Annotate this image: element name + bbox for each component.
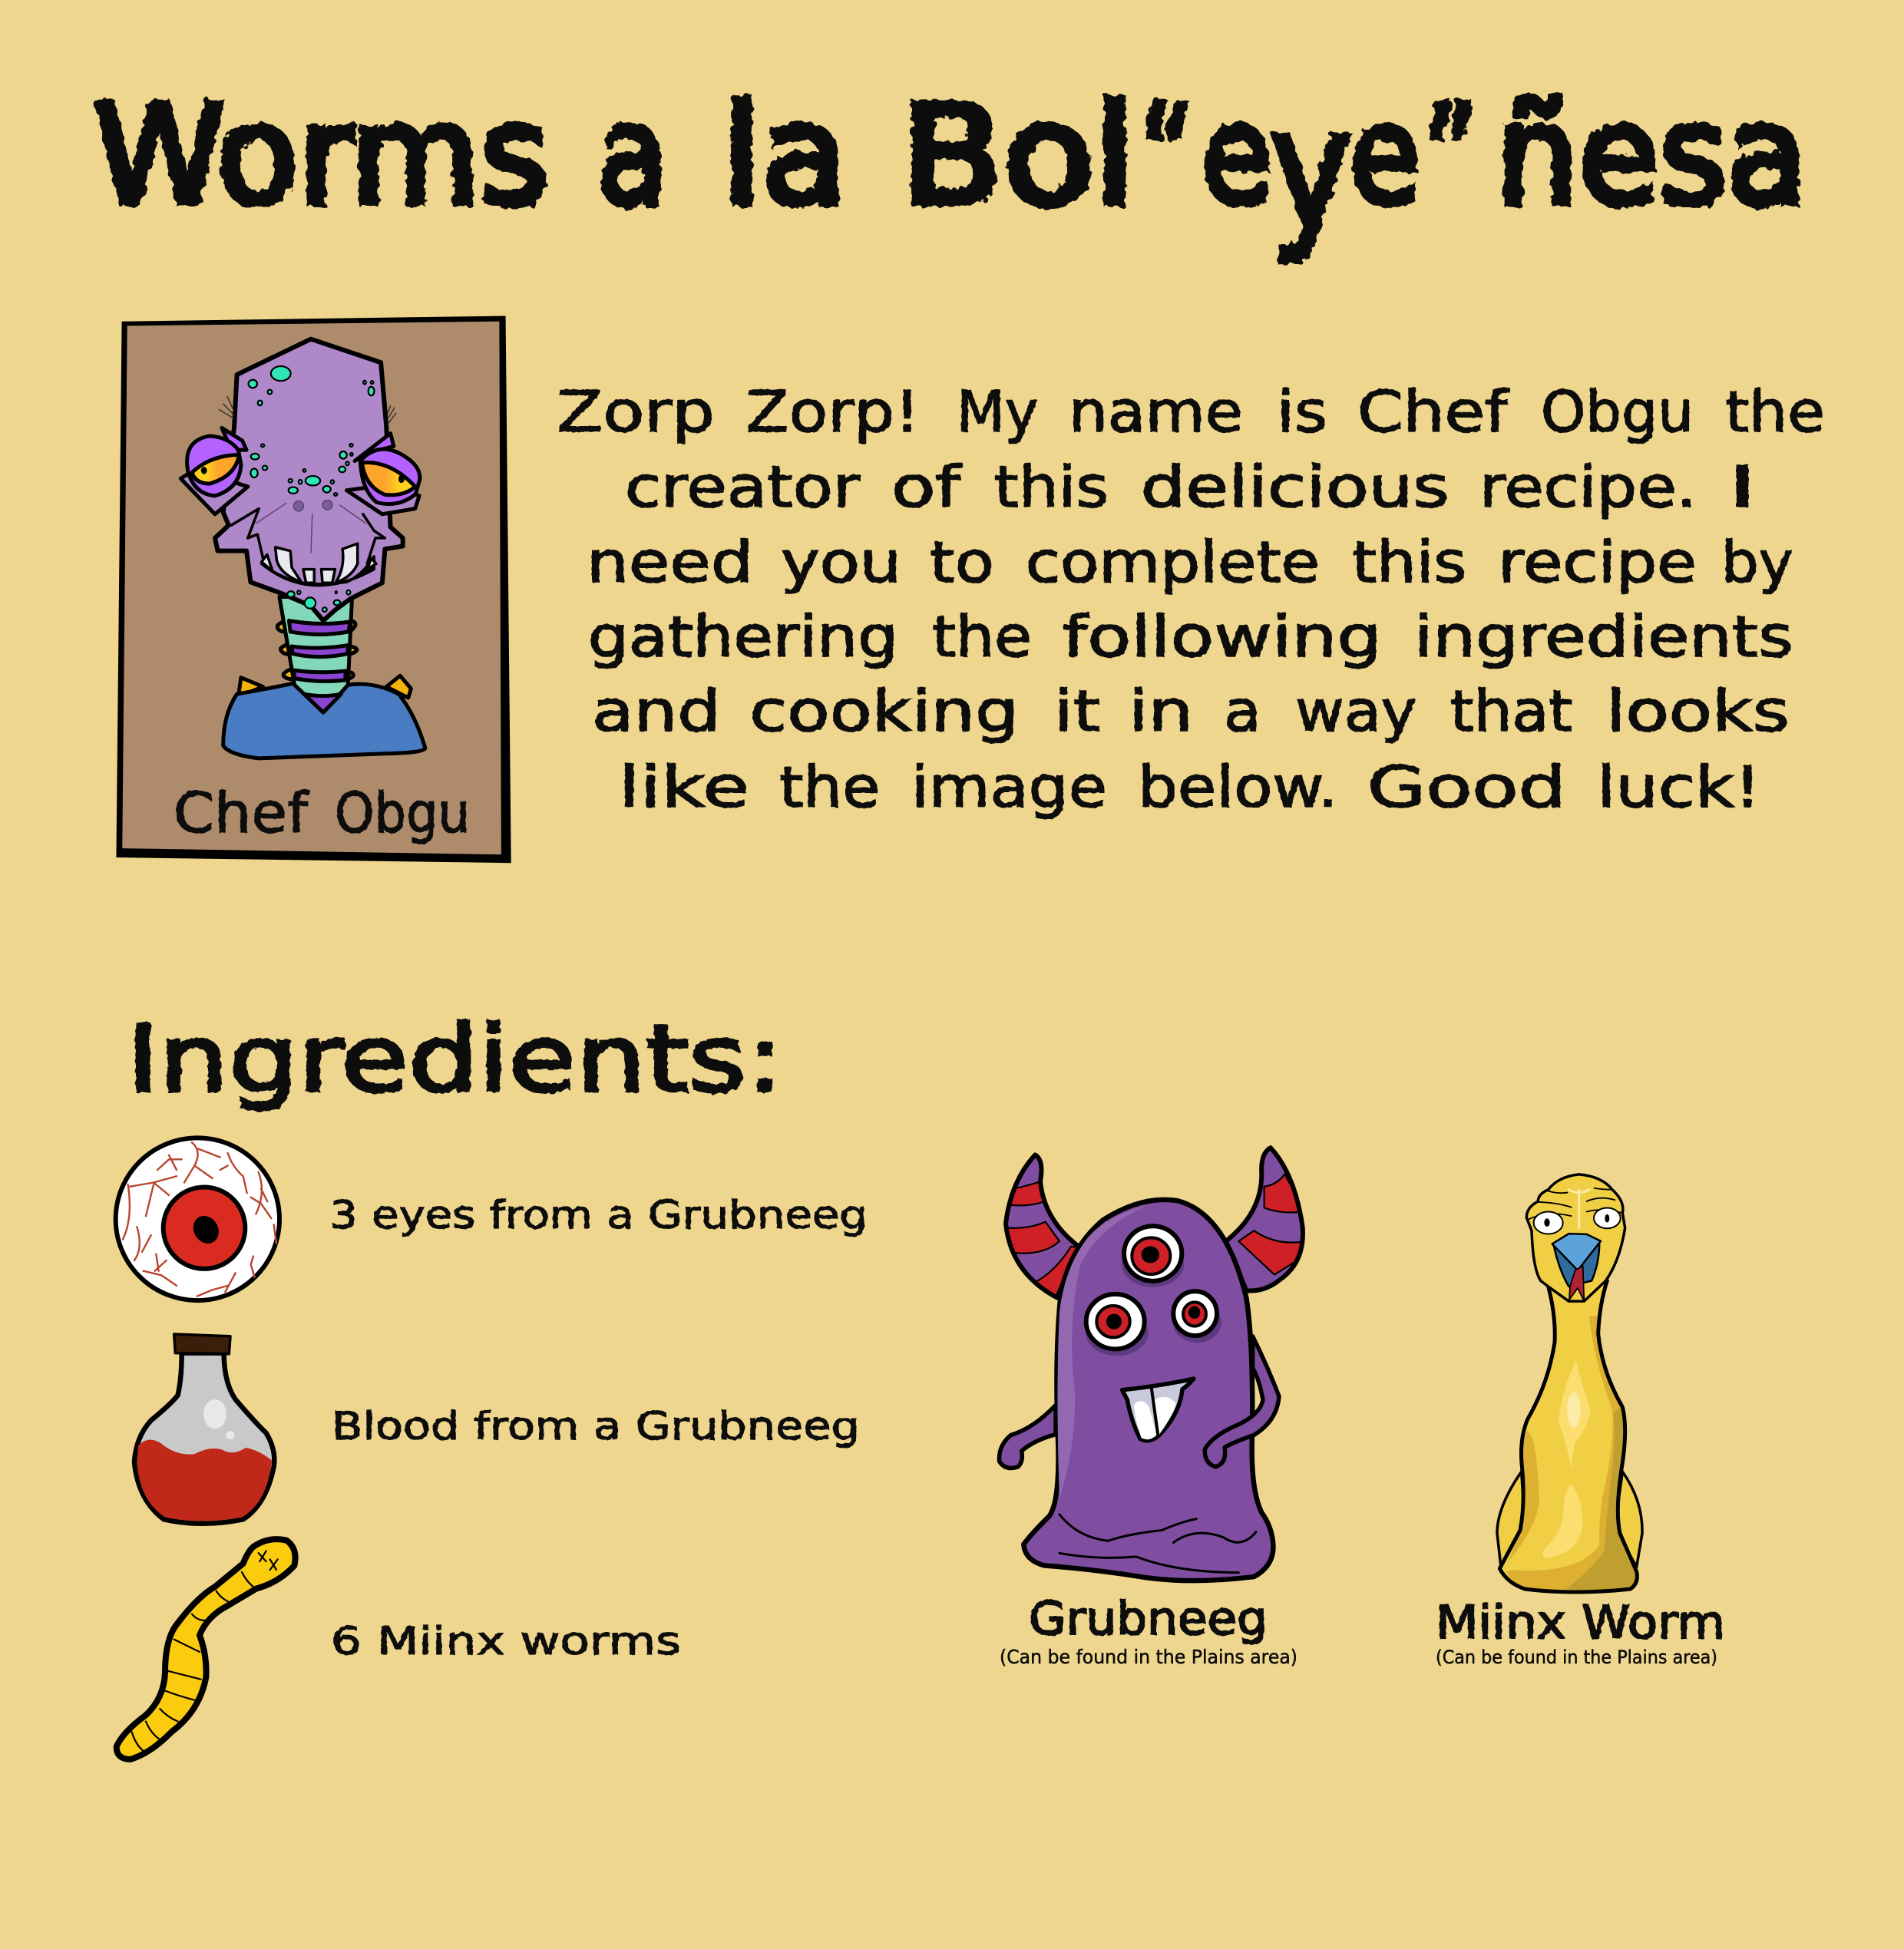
body outline [1499, 1280, 1637, 1592]
left horn [1006, 1155, 1079, 1297]
intro paragraph: to [930, 530, 994, 596]
intro paragraph: I [1727, 454, 1757, 520]
intro paragraph: it [1054, 679, 1100, 745]
heading: Ingredients: Ingredients: [127, 1006, 783, 1113]
portrait caption: Obgu [335, 781, 470, 845]
intro paragraph: and [592, 679, 721, 745]
intro paragraph: Good [1367, 755, 1566, 821]
ingredient text: eyes: 3 eyes from a Grubneeg [329, 1193, 868, 1237]
side lobes [1497, 1472, 1526, 1567]
intro paragraph: gathering [588, 604, 898, 670]
intro paragraph: complete [1026, 530, 1320, 596]
portrait: green freckles [249, 366, 374, 612]
intro paragraph: the [1725, 379, 1825, 445]
intro paragraph: the [932, 604, 1032, 670]
intro paragraph: in [1129, 679, 1193, 745]
eyeball iris [164, 1188, 245, 1269]
intro paragraph: name [1069, 379, 1243, 445]
intro paragraph: luck! [1597, 755, 1761, 821]
intro paragraph: Zorp! [745, 379, 920, 445]
portrait: mouth and teeth [231, 509, 385, 586]
eyeball veins [123, 1142, 276, 1297]
flask cork [174, 1334, 230, 1354]
portrait: nose [256, 500, 365, 553]
portrait caption [174, 781, 470, 845]
intro paragraph: way [1295, 679, 1416, 745]
intro paragraph: a [1224, 679, 1261, 745]
intro paragraph: cooking [749, 679, 1019, 745]
tongue [1569, 1266, 1584, 1301]
intro paragraph: this [1352, 530, 1466, 596]
location note: Grubneeg: (Can be found in the Plains area) [1000, 1646, 1297, 1668]
intro paragraph: My [957, 379, 1038, 445]
location note: Miinx Worm: (Can be found in the Plains area) [1436, 1647, 1717, 1668]
body highlights [1559, 1360, 1591, 1468]
title: Bol [901, 76, 1135, 235]
portrait: head hairs [219, 397, 396, 424]
icon: eyeball [116, 1138, 279, 1300]
intro paragraph: Zorp [557, 379, 715, 445]
intro paragraph: recipe [1498, 530, 1697, 596]
title: ñesa [1496, 76, 1807, 235]
intro paragraph: by [1721, 530, 1793, 596]
intro paragraph: ingredients [1414, 604, 1793, 670]
intro paragraph: the [779, 755, 880, 821]
intro paragraph [557, 379, 1825, 821]
right eye [1173, 1302, 1221, 1343]
head [1526, 1174, 1625, 1301]
creature: Grubneeg [998, 1148, 1305, 1581]
icon: worm [117, 1539, 296, 1759]
beak [1553, 1241, 1599, 1287]
flask blood [137, 1440, 272, 1521]
intro paragraph: Obgu [1541, 379, 1694, 445]
intro paragraph: that [1450, 679, 1572, 745]
creature label: Miinx Worm: Miinx Worm [1436, 1596, 1725, 1650]
intro paragraph: like [619, 755, 749, 821]
intro paragraph: is [1277, 379, 1327, 445]
body shading [1506, 1316, 1636, 1591]
right arm [1205, 1336, 1279, 1467]
body folds [1059, 1515, 1256, 1573]
eyes [1534, 1211, 1563, 1234]
portrait: right eye [346, 434, 420, 514]
title: ” [1424, 76, 1478, 235]
right horn [1226, 1148, 1303, 1291]
intro paragraph: Chef [1357, 379, 1509, 445]
left arm [1000, 1405, 1056, 1468]
worm segments and eyes [132, 1551, 278, 1751]
creature: Miinx Worm [1497, 1174, 1642, 1592]
panel: Chef Obgu portrait card [116, 316, 511, 863]
intro paragraph: of [891, 454, 962, 520]
card frame [116, 316, 511, 863]
portrait: left eye [180, 428, 248, 514]
body [1023, 1200, 1273, 1581]
title: e [1350, 76, 1420, 235]
intro paragraph: creator [625, 454, 861, 520]
title: e [1202, 76, 1272, 235]
mouth and teeth [1122, 1379, 1194, 1441]
intro paragraph: need [587, 530, 753, 596]
recipe infographic [93, 91, 1823, 1762]
title [94, 73, 1807, 266]
ingredient text: worms: 6 Miinx worms [331, 1619, 681, 1663]
portrait: body and neck [223, 596, 425, 758]
body highlight [1057, 1206, 1146, 1498]
portrait: head [215, 339, 403, 621]
title: la [722, 76, 848, 235]
top eye [1122, 1241, 1184, 1287]
left eye [1086, 1310, 1149, 1356]
body [1499, 1280, 1637, 1592]
intro paragraph: looks [1606, 679, 1790, 745]
intro paragraph: you [781, 530, 901, 596]
intro paragraph: delicious [1141, 454, 1449, 520]
intro paragraph: this [994, 454, 1109, 520]
ingredient text: blood: Blood from a Grubneeg [332, 1404, 860, 1449]
intro paragraph: image [911, 755, 1107, 821]
creature label: Grubneeg: Grubneeg [1029, 1592, 1268, 1646]
title: “ [1140, 76, 1194, 235]
intro paragraph: recipe. [1479, 454, 1697, 520]
title: Worms [94, 76, 549, 235]
title: y [1271, 73, 1351, 266]
intro paragraph: following [1063, 604, 1382, 670]
icon: blood flask [134, 1334, 274, 1524]
intro paragraph: below. [1138, 755, 1338, 821]
title: a [598, 76, 667, 235]
portrait caption: Chef [174, 781, 309, 845]
